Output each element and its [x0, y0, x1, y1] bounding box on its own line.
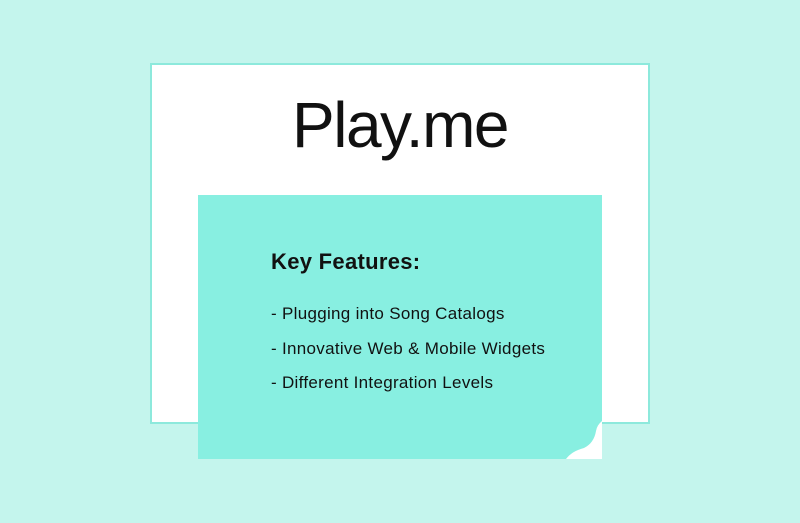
title: Play.me [292, 89, 508, 161]
icon: page curl corner [566, 421, 602, 459]
panel: key features card [198, 195, 602, 459]
heading: key features: Key Features: [271, 249, 420, 274]
text: feature 3: - Different Integration Levels [271, 373, 493, 392]
text: feature 2: - Innovative Web & Mobile Widgets [271, 339, 545, 358]
panel: white frame [150, 63, 650, 424]
text: feature 1: - Plugging into Song Catalogs [271, 304, 505, 323]
